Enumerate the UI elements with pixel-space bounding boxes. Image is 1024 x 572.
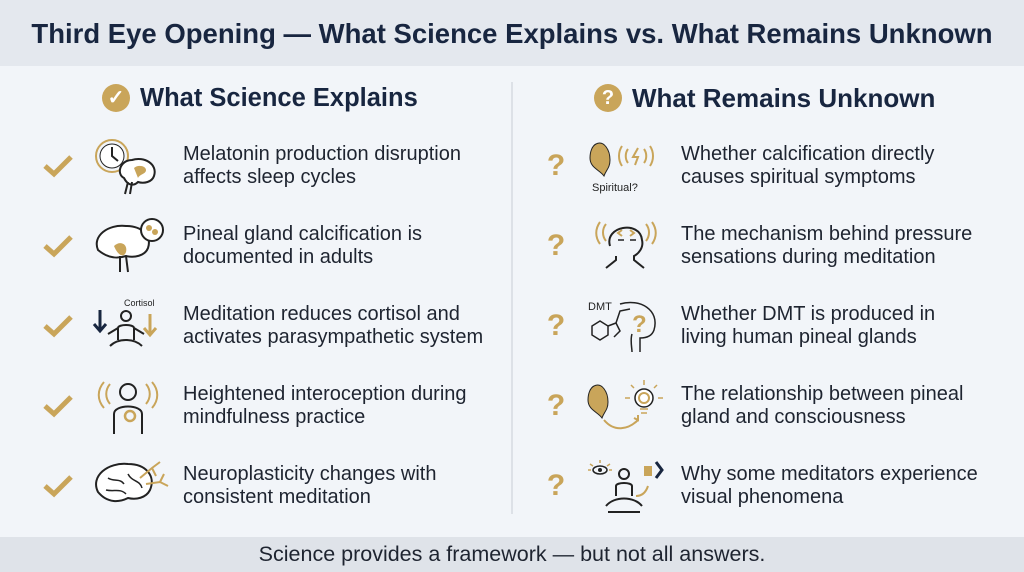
row: melatonin: affects sleep cycles [183, 166, 356, 188]
row: visual phenomena: Why some meditators experience [681, 463, 978, 485]
row: visual phenomena: ? [547, 469, 565, 502]
row: consciousness [547, 380, 963, 430]
row: calcification [43, 218, 422, 272]
heading: remains unknown: ? [602, 87, 614, 109]
icon: pineal and energy [590, 142, 654, 194]
row: calcification spiritual: causes spiritual symptoms [681, 166, 916, 188]
row: DMT: ? [547, 309, 565, 342]
row: calcification: Pineal gland calcification is [183, 223, 422, 245]
row: visual phenomena: visual phenomena [681, 486, 843, 508]
icon: person with waves [98, 381, 158, 434]
row: meditation cortisol: Meditation reduces cortisol and [183, 303, 460, 325]
heading: remains unknown: What Remains Unknown [632, 83, 935, 113]
row: calcification spiritual: ? [547, 149, 565, 182]
row: neuroplasticity: consistent meditation [183, 486, 371, 508]
heading: science explains: What Science Explains [140, 84, 418, 112]
footer: Science provides a framework — but not all answers. [259, 542, 765, 566]
row: neuroplasticity: Neuroplasticity changes with [183, 463, 436, 485]
row: pressure sensations: sensations during meditation [681, 246, 936, 268]
row: interoception: mindfulness practice [183, 406, 365, 428]
row: DMT [547, 301, 935, 352]
icon: DMT molecule [588, 301, 656, 352]
icon: brain with calcification [96, 218, 164, 272]
footer [0, 537, 1024, 572]
icon: meditator with cortisol arrows: Cortisol [124, 298, 155, 308]
heading: science explains: ✓ [108, 87, 124, 109]
icon: brain with neurons [95, 461, 168, 502]
icon: pineal to bulb [588, 380, 663, 430]
title [0, 0, 1024, 66]
row: consciousness: gland and consciousness [681, 406, 906, 428]
row: calcification spiritual [547, 142, 934, 194]
row: pressure sensations [547, 221, 972, 269]
row: consciousness: ? [547, 389, 565, 422]
icon: pineal and energy: Spiritual? [592, 182, 638, 194]
row: melatonin: Melatonin production disruption [183, 143, 461, 165]
row: visual phenomena [547, 460, 978, 513]
row: interoception: Heightened interoception during [183, 383, 467, 405]
row: pressure sensations: ? [547, 229, 565, 262]
icon: meditator with cortisol arrows [92, 298, 157, 347]
icon: DMT molecule: ? [632, 311, 647, 338]
icon: clock and brain [95, 139, 156, 194]
row: interoception [43, 381, 467, 434]
row: meditation cortisol: activates parasympathetic system [183, 326, 483, 348]
row: neuroplasticity [43, 461, 436, 508]
row: pressure sensations: The mechanism behind pressure [681, 223, 972, 245]
row: meditation cortisol [43, 298, 483, 348]
row: consciousness: The relationship between pineal [681, 383, 963, 405]
row: DMT: Whether DMT is produced in [681, 303, 935, 325]
row: melatonin [43, 139, 461, 194]
row: calcification: documented in adults [183, 246, 373, 268]
icon: head with pressure [595, 221, 657, 269]
icon: DMT molecule: DMT [588, 301, 612, 313]
row: DMT: living human pineal glands [681, 326, 917, 348]
icon: meditator with visions [588, 460, 664, 513]
row: calcification spiritual: Whether calcification directly [681, 143, 934, 165]
title: Third Eye Opening — What Science Explains vs. What Remains Unknown [31, 18, 993, 49]
